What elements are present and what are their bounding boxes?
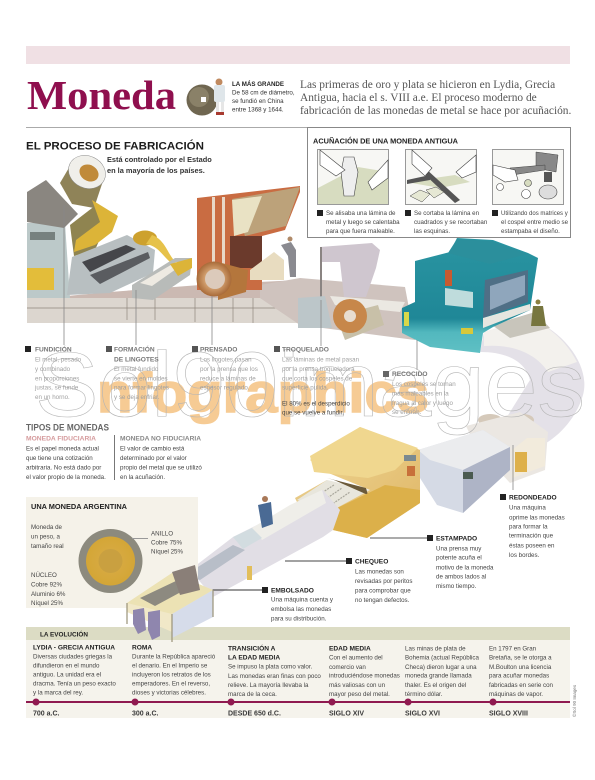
- step 9: embolsado: [262, 587, 334, 622]
- timeline: roma: Durante la República apareció: [132, 654, 216, 660]
- caption 1: para que fuera maleable.: [326, 228, 395, 235]
- callout: la más grande: LA MÁS GRANDE: [232, 81, 284, 88]
- step 2: formación de lingotes: y se deja enfriar.: [114, 394, 160, 401]
- timeline: siglo xvi: moneda grande llamada: [405, 672, 472, 680]
- step 9: embolsado: EMBOLSADO: [271, 588, 314, 594]
- step 1: fundición: y combinado: [35, 366, 71, 373]
- watermark: nfographics: [97, 361, 429, 424]
- timeline: siglo xviii: Bretaña, se le otorga a: [489, 654, 552, 662]
- step 3: prensado: [192, 346, 258, 392]
- heading: tipos de monedas: TIPOS DE MONEDAS: [26, 422, 109, 432]
- step 8: chequeo: para comprobar que: [355, 588, 411, 594]
- timeline: roma: dioses y victorias célebres.: [132, 690, 206, 696]
- timeline: siglo xvi: thaler. Es el origen del: [405, 682, 466, 689]
- column: moneda no fiduciaria: determinado por el valor: [120, 455, 187, 462]
- illustration: die cutting press: [298, 243, 384, 340]
- timeline: transición: relieve. La mayoría llevaba la: [228, 682, 309, 689]
- timeline: siglo xviii: SIGLO XVIII: [489, 710, 528, 718]
- timeline: edad media: mayor peso del metal.: [329, 691, 390, 698]
- timeline: transición: Las monedas eran finas con poco: [228, 673, 321, 680]
- column: moneda no fiduciaria: El valor de cambio está: [120, 446, 185, 452]
- text: ring: ANILLO: [151, 530, 173, 538]
- step 1: fundición: El metal, pesado: [35, 356, 82, 364]
- step 2: formación de lingotes: se vierte en moldes: [114, 376, 168, 382]
- timeline: lydia: 700 a.C.: [33, 710, 60, 718]
- callout: la más grande: [232, 81, 295, 114]
- timeline: transición: [228, 644, 321, 718]
- step 7: estampado: mismo tiempo.: [436, 583, 477, 590]
- step 3: prensado: espesor regulado.: [200, 384, 250, 392]
- heading: proceso: EL PROCESO DE FABRICACIÓN: [26, 140, 204, 152]
- step 5: recocido: RECOCIDO: [392, 371, 428, 378]
- timeline: roma: ROMA: [132, 644, 152, 652]
- divider: [26, 127, 307, 128]
- icon: hammering the coin: [492, 150, 564, 204]
- timeline: roma: emperadores. En el reverso,: [132, 680, 210, 688]
- step 2: formación de lingotes: El metal fundido: [114, 366, 159, 373]
- credit: ©Sol 90 Images: [571, 684, 577, 717]
- heading: acuñación: ACUÑACIÓN DE UNA MONEDA ANTIGUA: [313, 136, 459, 146]
- step 4: troquelado: Las láminas de metal pasan: [282, 356, 360, 364]
- timeline: edad media: introduciéndose monedas: [329, 672, 400, 680]
- caption 2: [405, 210, 488, 235]
- step 9: embolsado: Una máquina cuenta y: [271, 596, 334, 604]
- timeline: edad media: más valiosas con un: [329, 682, 386, 689]
- callout: la más grande: entre 1368 y 1644.: [232, 106, 284, 114]
- illustration: rolling press: [196, 186, 300, 300]
- step 3: prensado: por la prensa que los: [200, 366, 258, 373]
- icon: cutting the sheet: [406, 150, 476, 204]
- timeline: siglo xvi: Las minas de plata de: [405, 646, 466, 652]
- step 7: estampado: ESTAMPADO: [436, 536, 477, 542]
- step 4: troquelado: que se vuelve a fundir.: [282, 410, 344, 416]
- timeline: siglo xviii: para acuñar monedas: [489, 672, 549, 680]
- step 8: chequeo: [346, 558, 412, 604]
- step 1: fundición: en un horno.: [35, 394, 70, 401]
- timeline: transición: LA EDAD MEDIA: [228, 654, 280, 662]
- timeline: lydia: difundieron en el mundo: [33, 662, 100, 670]
- step 3: prensado: reduce a láminas de: [200, 376, 256, 382]
- timeline: edad media: SIGLO XIV: [329, 710, 364, 718]
- callout: la más grande: De 58 cm de diámetro,: [232, 90, 295, 96]
- illustration: bagging table: [127, 565, 213, 642]
- timeline: siglo xvi: término dólar.: [405, 691, 443, 698]
- column: moneda fiduciaria: Es el papel moneda actual: [26, 446, 99, 452]
- step 8: chequeo: CHEQUEO: [355, 558, 388, 566]
- timeline: edad media: EDAD MEDIA: [329, 646, 371, 652]
- timeline: edad media: Con el aumento del: [329, 654, 383, 662]
- timeline: siglo xviii: M.Boulton una licencia: [489, 664, 552, 671]
- caption 1: [317, 210, 400, 235]
- text: ring: Cobre 75%: [151, 540, 182, 546]
- caption 3: [492, 210, 569, 235]
- step 1: fundición: en proporciones: [35, 376, 79, 382]
- caption 1: metal y luego se calentaba: [326, 219, 400, 226]
- step 2: formación de lingotes: DE LINGOTES: [114, 356, 159, 364]
- step 8: chequeo: Las monedas son: [355, 568, 404, 576]
- step 5: recocido: [383, 371, 456, 416]
- heading: la evolución: LA EVOLUCIÓN: [40, 630, 88, 638]
- step 6: redondeado: los bordes.: [509, 552, 540, 559]
- illustration: yellow machine: [295, 427, 420, 538]
- timeline: siglo xviii: máquinas de vapor.: [489, 691, 543, 698]
- timeline: roma: [132, 644, 216, 718]
- subheading: en la mayoría de los países.: [107, 166, 205, 175]
- step 4: troquelado: El 80% es el desperdicio: [282, 400, 350, 408]
- step 8: chequeo: revisadas por peritos: [355, 578, 412, 585]
- timeline: siglo xvi: [404, 646, 480, 718]
- timeline: roma: el denario. En el Imperio se: [132, 662, 208, 670]
- step 1: fundición: justas, se funde: [34, 384, 79, 392]
- text: size note: un peso, a: [31, 534, 60, 540]
- illustration: teal machine: [402, 238, 546, 353]
- callout: la más grande: se fundió en China: [232, 98, 284, 105]
- step 6: redondeado: oprime las monedas: [509, 514, 565, 522]
- step 1: fundición: [25, 344, 82, 401]
- icon: coin: [78, 529, 142, 593]
- text: size note: tamaño real: [31, 543, 64, 550]
- step 5: recocido: más maleables en la: [392, 390, 449, 398]
- step 6: redondeado: Una máquina: [509, 504, 546, 512]
- step 4: troquelado: superficie pulida.: [282, 384, 329, 392]
- text: core: Cobre 92%: [31, 582, 62, 588]
- timeline: siglo xvi: Bohemia (actual República: [405, 654, 480, 662]
- step 7: estampado: de ambos lados al: [436, 574, 486, 580]
- step 6: redondeado: para formar la: [509, 524, 548, 530]
- text: core: Níquel 25%: [31, 600, 63, 607]
- caption 3: Utilizando dos matrices y: [501, 211, 568, 217]
- illustration: furnace: [27, 149, 118, 298]
- step 4: troquelado: [274, 346, 360, 416]
- intro text: Antigua, hacia el s. VIII a.e. El proceso moderno de: [300, 92, 537, 104]
- column: moneda fiduciaria: el valor propio de la moneda.: [26, 474, 106, 481]
- column: moneda fiduciaria: arbitraria. No está dado por: [26, 464, 101, 472]
- timeline: edad media: [328, 646, 400, 718]
- timeline: siglo xviii: [489, 646, 554, 718]
- timeline: lydia: [32, 644, 116, 718]
- step 7: estampado: [427, 535, 494, 590]
- timeline: lydia: Diversas ciudades griegas la: [33, 654, 113, 660]
- column: moneda fiduciaria: [26, 436, 106, 481]
- text: ring: Níquel 25%: [151, 548, 183, 556]
- timeline: lydia: y la marca del rey.: [33, 690, 83, 696]
- caption 1: Se alisaba una lámina de: [326, 210, 396, 217]
- column: moneda fiduciaria: que tiene una cotización: [26, 455, 93, 462]
- illustration: curved conveyor: [466, 312, 584, 483]
- caption 2: cuadrados y se recortaban: [414, 219, 488, 226]
- step 1: fundición: FUNDICIÓN: [35, 344, 72, 354]
- timeline: lydia: LYDIA - GRECIA ANTIGUA: [33, 644, 115, 652]
- title: Moneda: [27, 72, 176, 118]
- text: core: NÚCLEO: [31, 572, 57, 579]
- step 7: estampado: motivo de la moneda: [436, 564, 494, 572]
- text: core: Aluminio 6%: [31, 591, 66, 598]
- panel: la evolución: [26, 627, 570, 718]
- icon: giant coin and person: [186, 78, 225, 116]
- divider: [114, 435, 115, 480]
- timeline: transición: Se impuso la plata como valor.: [228, 664, 313, 670]
- subheading: Está controlado por el Estado: [107, 155, 212, 164]
- caption 2: Se cortaba la lámina en: [414, 210, 480, 217]
- caption 2: las esquinas.: [414, 228, 450, 235]
- timeline: lydia: antiguo. La unidad era el: [33, 672, 101, 678]
- step 2: formación de lingotes: para formar lingotes: [114, 384, 169, 392]
- intro text: Las primeras de oro y plata se hicieron en Lydia, Grecia: [300, 79, 555, 91]
- timeline: transición: TRANSICIÓN A: [228, 644, 276, 652]
- heading: una moneda argentina: UNA MONEDA ARGENTINA: [31, 502, 128, 511]
- panel: acuñación de una moneda antigua: [308, 128, 570, 238]
- step 7: estampado: Una prensa muy: [436, 546, 482, 552]
- step 5: recocido: se enfrían.: [392, 409, 422, 416]
- step 4: troquelado: que corta los cospeles de: [282, 376, 353, 382]
- step 5: recocido: fragua al calor y luego: [392, 400, 453, 407]
- step 6: redondeado: terminación que: [509, 532, 554, 540]
- illustration: floor and conveyor: [27, 278, 415, 340]
- illustration: grey machine: [418, 430, 510, 513]
- timeline: siglo xvi: Checa) dieron lugar a una: [405, 664, 477, 671]
- step 6: redondeado: éstas poseen en: [509, 542, 555, 550]
- step 3: prensado: Los lingotes pasan: [200, 356, 252, 364]
- timeline: edad media: comercio van: [329, 664, 366, 671]
- illustration: molds: [67, 230, 192, 300]
- timeline: transición: DESDE 650 d.C.: [228, 710, 281, 718]
- timeline: transición: marca de la ceca.: [228, 691, 277, 698]
- caption 3: el cospel entre medio se: [501, 219, 569, 226]
- caption 3: estampaba el diseño.: [501, 228, 560, 235]
- timeline: roma: 300 a.C.: [132, 710, 159, 718]
- step 4: troquelado: TROQUELADO: [282, 346, 329, 354]
- timeline: siglo xvi: SIGLO XVI: [405, 710, 440, 718]
- text: size note: Moneda de: [31, 524, 63, 531]
- step 4: troquelado: por la prensa troqueladora: [282, 366, 355, 373]
- timeline: siglo xviii: fabricadas en serie con: [489, 682, 554, 689]
- step 9: embolsado: para su distribución.: [271, 616, 327, 622]
- step 9: embolsado: embolsa las monedas: [271, 606, 331, 613]
- step 2: formación de lingotes: [106, 344, 169, 401]
- timeline: siglo xviii: En 1797 en Gran: [489, 646, 537, 652]
- watermark: Sol90images: [35, 334, 585, 436]
- intro text: fabricación de las monedas de metal se hace por acuñación.: [300, 105, 572, 117]
- column: moneda no fiduciaria: [120, 436, 202, 481]
- timeline: roma: incluyeron los retratos de los: [132, 672, 211, 678]
- illustration: inspection conveyor: [185, 490, 340, 597]
- column: moneda fiduciaria: MONEDA FIDUCIARIA: [26, 436, 97, 442]
- column: moneda no fiduciaria: en la acuñación.: [120, 474, 165, 481]
- step 6: redondeado: REDONDEADO: [509, 494, 557, 502]
- step 5: recocido: Los cospeles se tornan: [392, 381, 456, 388]
- timeline: lydia: dracma. Tenía un peso exacto: [33, 680, 116, 688]
- step 8: chequeo: no tengan defectos.: [355, 597, 410, 604]
- column: moneda no fiduciaria: propio del metal que se utilizó: [120, 464, 202, 472]
- step 3: prensado: PRENSADO: [200, 346, 237, 354]
- panel: una moneda argentina: [26, 497, 198, 608]
- column: moneda no fiduciaria: MONEDA NO FIDUCIARIA: [120, 436, 202, 442]
- step 6: redondeado: [500, 494, 565, 559]
- callout leaders: [64, 205, 513, 590]
- icon: hands and metal sheet: [318, 150, 388, 204]
- top banner: [26, 46, 570, 64]
- text: ring: [132, 530, 183, 556]
- step 7: estampado: potente acuña el: [436, 554, 482, 562]
- step 2: formación de lingotes: FORMACIÓN: [114, 344, 155, 354]
